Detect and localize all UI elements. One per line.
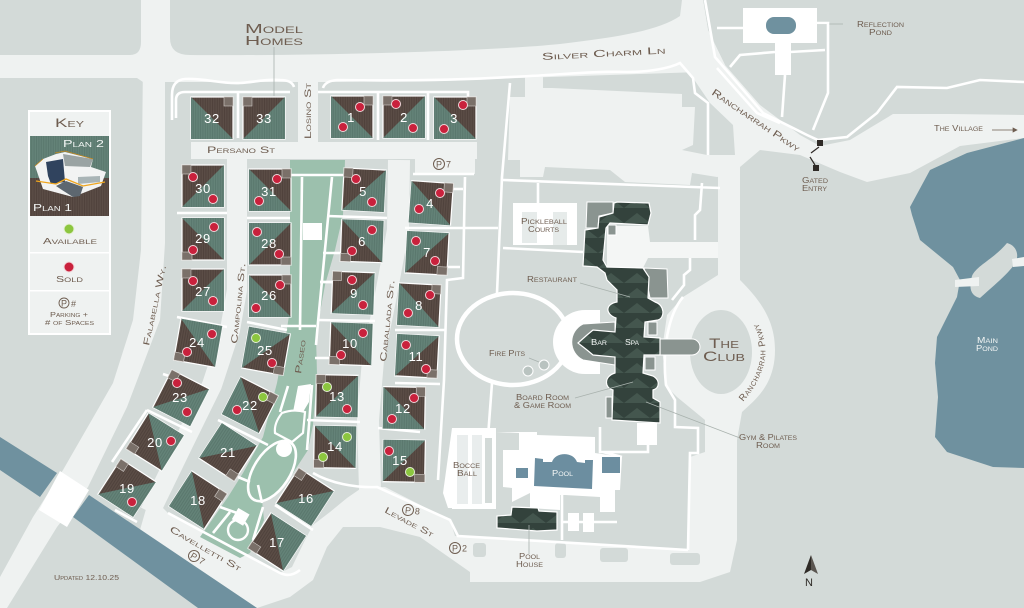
house lots <box>98 96 476 571</box>
pool house label <box>516 552 543 569</box>
parking 2 marker: P <box>452 544 458 554</box>
pool <box>516 454 620 489</box>
paseo label: Paseo <box>293 339 308 374</box>
gated entry label: Gated <box>802 176 829 185</box>
lot 25: 25 <box>257 343 273 358</box>
lot 20: 20 <box>147 435 163 450</box>
lot 33 <box>243 97 285 139</box>
club drive gray islands <box>473 310 752 565</box>
bocce ball courts <box>452 428 496 509</box>
lot 23 <box>153 370 209 426</box>
falabella label: Falabella Wy. <box>141 264 168 346</box>
parking 7 persano marker <box>434 158 451 170</box>
board room label <box>514 393 571 410</box>
lot 6 <box>340 219 384 263</box>
north arrow <box>804 555 818 589</box>
board room label: Board Room <box>516 393 569 402</box>
pickleball courts: Pickleball <box>521 217 568 226</box>
bocce ball courts: Ball <box>457 469 478 478</box>
model homes heading <box>245 21 303 48</box>
parking 7 persano marker: 7 <box>446 160 451 170</box>
pool house building <box>497 507 557 531</box>
lot 10: 10 <box>342 336 358 351</box>
lot 11: 11 <box>409 349 423 364</box>
club grounds white paths <box>457 180 720 550</box>
reflection pond label <box>857 20 904 37</box>
lot 6: 6 <box>358 234 366 249</box>
updated date: Updated 12.10.25 <box>54 573 119 582</box>
lot 22: 22 <box>242 398 258 413</box>
lot 8 <box>397 283 441 327</box>
lot 5: 5 <box>359 184 367 199</box>
lot 14 <box>314 426 356 468</box>
parking legend: P <box>61 298 67 308</box>
lot 24 <box>174 319 222 367</box>
sold legend: Sold <box>56 275 84 284</box>
lot 7 <box>405 231 449 275</box>
main pond label: Main <box>977 336 998 345</box>
key panel <box>29 111 110 334</box>
parking legend: # of Spaces <box>45 320 95 327</box>
sold legend <box>56 262 84 284</box>
lot 27 <box>182 269 224 311</box>
bridge over canal <box>39 471 89 527</box>
lot 4: 4 <box>426 196 434 211</box>
club secondary gray roofs <box>572 202 700 418</box>
pickleball courts <box>513 203 577 245</box>
rancharrah upper label: Rancharrah Pkwy <box>709 87 802 155</box>
neighbourhood white paths <box>112 63 708 575</box>
lot 21 <box>199 423 257 481</box>
lot 24: 24 <box>189 335 205 350</box>
lot 1 <box>331 96 373 138</box>
lot 18: 18 <box>190 493 206 508</box>
lot 29: 29 <box>195 231 211 246</box>
model homes heading: Model <box>245 21 303 36</box>
canal water <box>0 437 257 608</box>
lot 7: 7 <box>423 245 431 260</box>
lot 2 <box>383 96 425 138</box>
plan illustration: Plan 2 <box>63 139 105 150</box>
parking 7 persano marker: P <box>436 160 442 170</box>
lot 29 <box>182 218 224 260</box>
model homes heading: Homes <box>245 33 303 48</box>
lot 18 <box>169 471 227 529</box>
parking legend: Parking + <box>50 312 88 319</box>
lot 15 <box>383 440 425 482</box>
lot 30 <box>182 165 224 207</box>
gym label: Room <box>756 441 780 450</box>
gated entry icon <box>810 140 823 171</box>
rancharrah curved label: Rancharrah Pkwy <box>738 325 766 402</box>
plan illustration <box>30 136 109 216</box>
lot 12 <box>383 387 425 429</box>
lot 28 <box>249 223 291 265</box>
lot 27: 27 <box>195 284 211 299</box>
parking 2 marker: 2 <box>462 544 467 554</box>
reflection pond grounds <box>705 0 1024 140</box>
available legend: Available <box>43 237 97 246</box>
lot 16: 16 <box>298 491 314 506</box>
lot 30: 30 <box>195 181 211 196</box>
gated entry label <box>802 176 829 193</box>
paseo walking paths <box>213 175 387 540</box>
fire pit icons <box>523 360 549 376</box>
lot 32 <box>191 97 233 139</box>
north arrow: N <box>805 577 813 589</box>
lot 1: 1 <box>347 110 355 125</box>
pool: Pool <box>552 469 574 478</box>
pool house label: House <box>516 560 543 569</box>
lot 10 <box>329 322 373 366</box>
pool deck <box>443 428 622 512</box>
lot 19: 19 <box>119 481 135 496</box>
pond footbridges <box>955 257 1024 287</box>
lot 28: 28 <box>261 236 277 251</box>
cavelletti label: Cavelletti St <box>168 524 244 573</box>
lot 3: 3 <box>450 111 458 126</box>
lot 33: 33 <box>256 111 272 126</box>
levade label: Levade St <box>383 505 436 539</box>
board room label: & Game Room <box>514 401 571 410</box>
the village label: The Village <box>934 124 983 133</box>
lot 22 <box>222 377 278 433</box>
silver charm label: Silver Charm Ln <box>542 46 666 63</box>
lot 31 <box>249 169 291 211</box>
arrow to the village <box>992 128 1017 132</box>
lower deck squares <box>568 423 657 532</box>
lot 19 <box>98 459 156 517</box>
parking 7 street marker <box>186 548 207 567</box>
lot 16 <box>276 468 334 526</box>
parking 8 marker: 8 <box>414 506 420 517</box>
parking legend <box>45 298 95 327</box>
callout leader lines <box>274 24 843 554</box>
the club heading: The <box>709 335 739 351</box>
key title: Key <box>55 116 85 130</box>
reflection pond label: Pond <box>869 28 893 37</box>
gym label <box>739 433 797 450</box>
caballada label: Caballada St. <box>378 280 397 362</box>
parking 7 street marker: 7 <box>197 556 207 567</box>
bocce ball courts: Bocce <box>453 461 480 470</box>
parking 2 marker <box>450 542 467 554</box>
plan illustration: Plan 1 <box>33 203 73 214</box>
pond island <box>970 243 1017 298</box>
lot 12: 12 <box>395 401 411 416</box>
persano label: Persano St <box>207 145 276 155</box>
lot 14: 14 <box>327 439 343 454</box>
lot 26 <box>249 275 291 317</box>
restaurant label: Restaurant <box>527 275 577 284</box>
available legend <box>43 224 97 246</box>
main pond <box>910 138 1024 468</box>
main pond label <box>976 336 999 353</box>
parking 7 street marker: P <box>189 551 199 562</box>
the club heading <box>703 335 745 364</box>
lot 23: 23 <box>172 390 188 405</box>
fire pits label: Fire Pits <box>489 349 525 358</box>
lot 21: 21 <box>220 445 236 460</box>
lot 32: 32 <box>204 111 220 126</box>
lot 13: 13 <box>329 389 345 404</box>
bar label: Bar <box>591 338 608 347</box>
lot 26: 26 <box>261 288 277 303</box>
lot 9 <box>331 271 375 315</box>
lot 17 <box>248 513 306 571</box>
lot 5 <box>342 168 386 212</box>
losino label: Losino St <box>303 82 313 139</box>
spa label: Spa <box>625 338 639 347</box>
gym label: Gym & Pilates <box>739 433 797 442</box>
pickleball courts: Courts <box>528 225 559 234</box>
lot 17: 17 <box>269 535 285 550</box>
lot 13 <box>316 375 358 417</box>
lot 25 <box>242 327 290 375</box>
lot 3 <box>434 97 476 139</box>
reflection pond label: Reflection <box>857 20 904 29</box>
lot 15: 15 <box>392 453 408 468</box>
gated entry label: Entry <box>802 184 827 193</box>
campolina label: Campolina St. <box>229 263 247 344</box>
lot 11 <box>395 334 439 378</box>
lot 31: 31 <box>261 184 277 199</box>
parking 8 marker <box>402 504 420 517</box>
lot 8: 8 <box>415 298 423 313</box>
lot 9: 9 <box>350 286 358 301</box>
the club heading: Club <box>703 348 745 364</box>
lot 2: 2 <box>400 110 408 125</box>
parking 8 marker: P <box>405 505 411 516</box>
lot 4 <box>409 181 453 225</box>
main pond label: Pond <box>976 344 999 353</box>
lot 20 <box>126 413 184 471</box>
club main building <box>578 202 663 423</box>
pool house label: Pool <box>519 552 541 561</box>
paseo green park <box>200 160 345 558</box>
parking legend: # <box>71 299 76 309</box>
